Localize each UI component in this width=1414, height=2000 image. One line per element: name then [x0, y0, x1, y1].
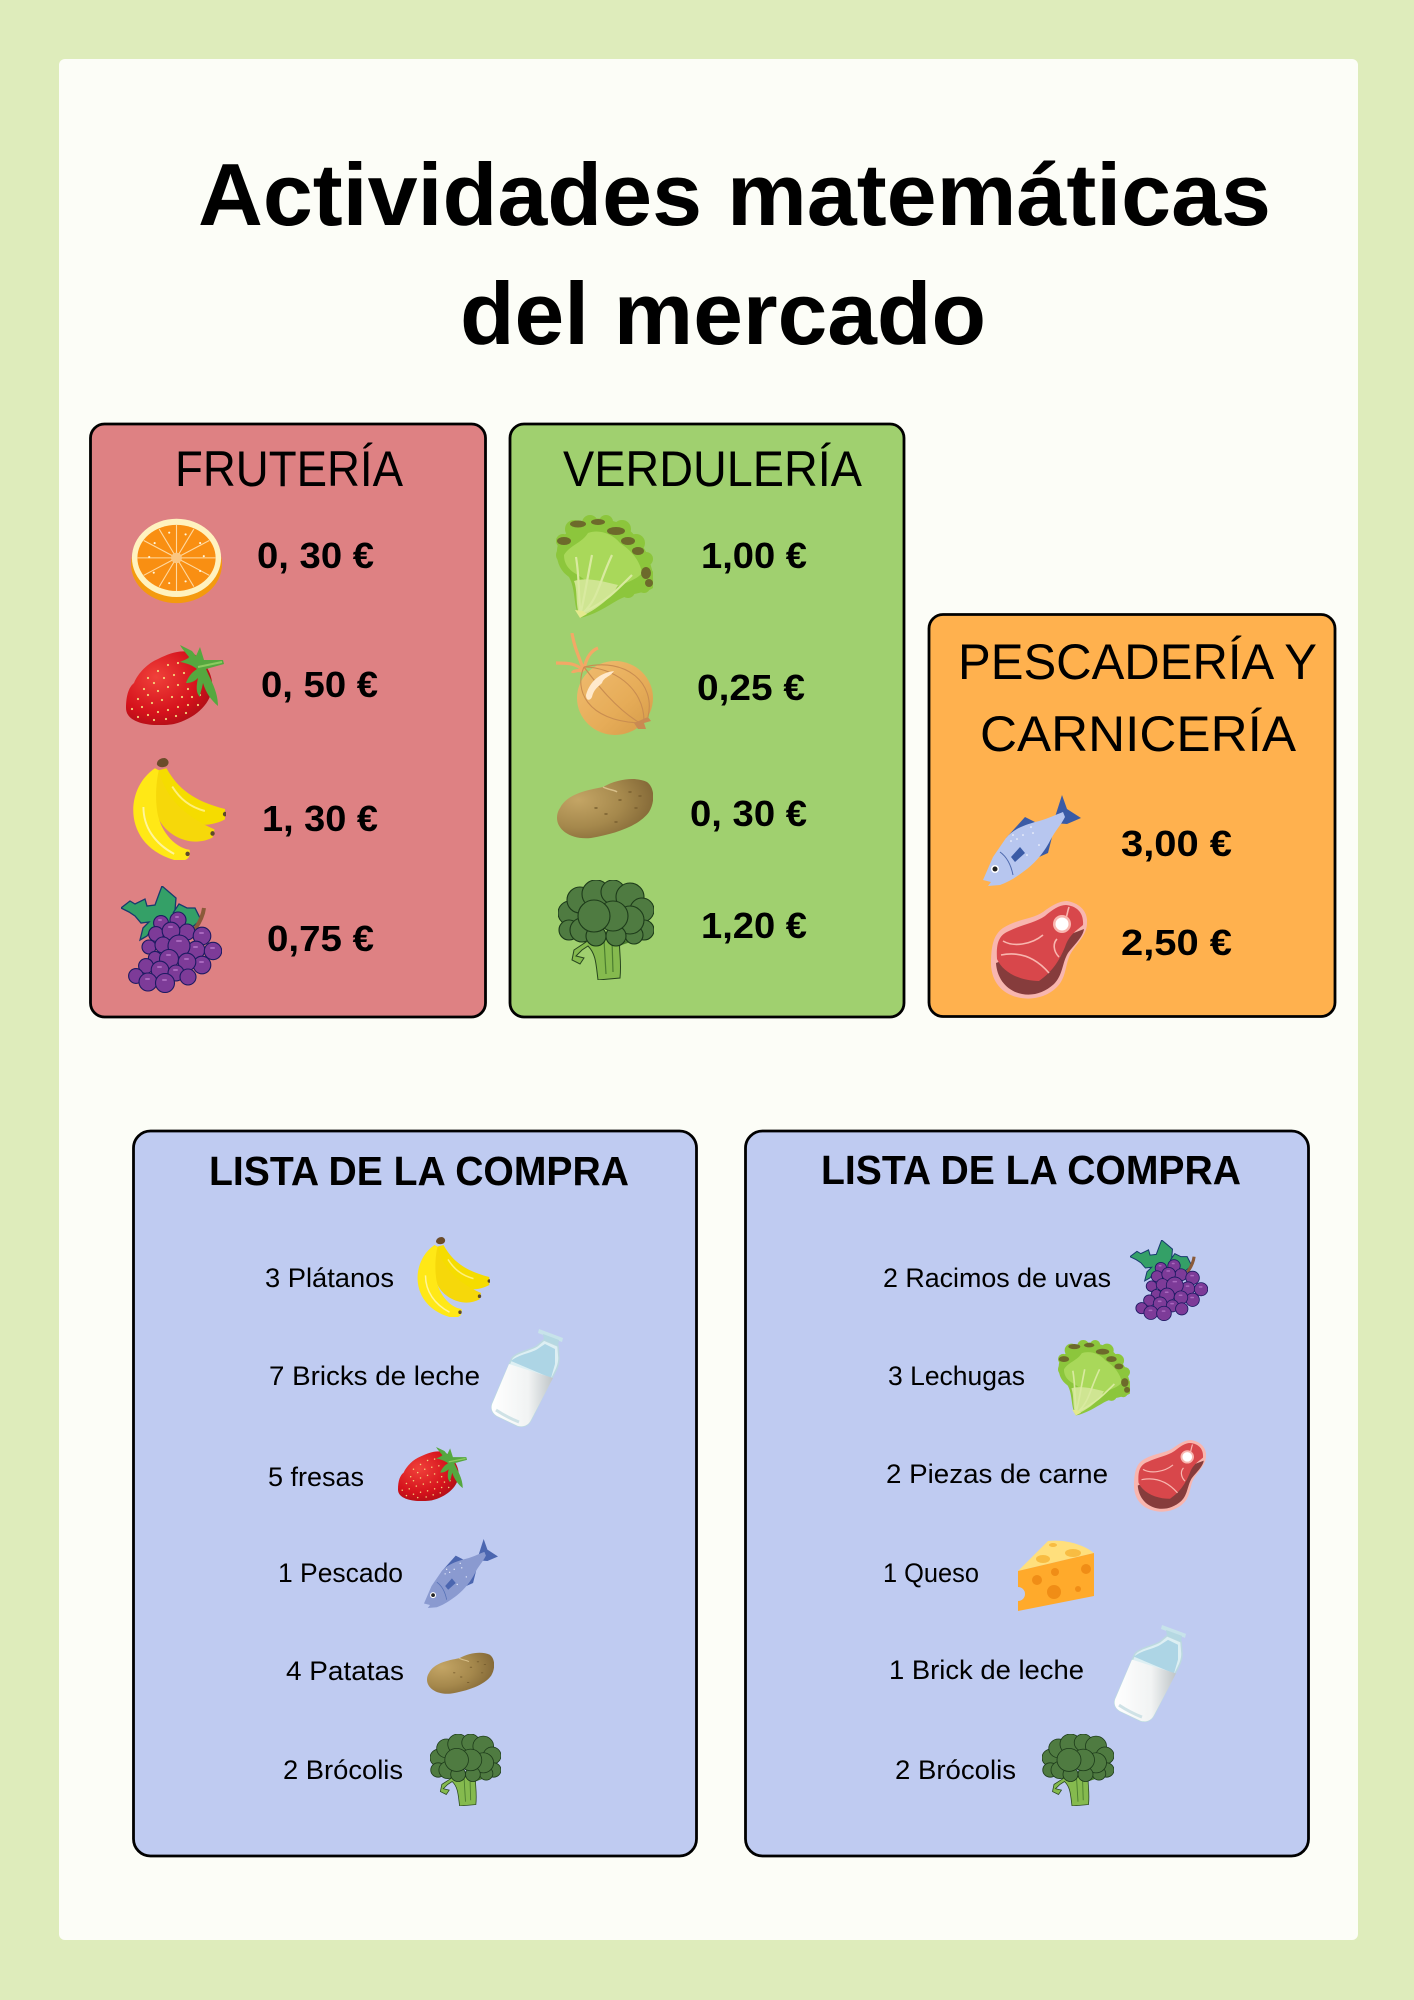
item: 3 lechugas: 3 Lechugas [888, 1361, 1025, 1391]
icon: bananas [418, 1237, 489, 1318]
price: lettuce: 1,00 € [701, 535, 807, 576]
icon: grapes [121, 886, 222, 992]
icon: fish [424, 1539, 498, 1608]
item: 2 brócolis: 2 Brócolis [283, 1755, 403, 1785]
title: Actividades matemáticas [198, 145, 1271, 244]
panel: shopping list 2 [746, 1131, 1308, 1856]
icon: strawberry [126, 645, 224, 725]
item: 7 bricks de leche: 7 Bricks de leche [269, 1361, 480, 1391]
price: fish: 3,00 € [1121, 823, 1232, 864]
panel: verdulería [510, 424, 904, 1017]
price: grapes: 0,75 € [267, 918, 374, 959]
icon: lettuce [1058, 1340, 1131, 1416]
icon: broccoli [430, 1734, 501, 1806]
icon: meat [991, 901, 1087, 999]
icon: orange [131, 519, 222, 603]
heading: pescadería y carnicería: PESCADERÍA Y [958, 634, 1317, 690]
title: del mercado [460, 264, 986, 363]
item: 1 brick de leche: 1 Brick de leche [889, 1655, 1084, 1685]
icon: potato [427, 1653, 494, 1694]
heading: frutería: FRUTERÍA [175, 441, 404, 497]
price: strawberry: 0, 50 € [261, 664, 378, 705]
title [198, 145, 1271, 363]
icon: meat [1134, 1440, 1206, 1512]
price: bananas: 1, 30 € [262, 798, 378, 839]
icon: grapes [1130, 1240, 1208, 1321]
item: 2 racimos de uvas: 2 Racimos de uvas [883, 1263, 1111, 1293]
icon: cheese [1018, 1541, 1094, 1611]
item: 4 patatas: 4 Patatas [286, 1656, 404, 1686]
icon: broccoli [1042, 1734, 1114, 1806]
icon: milk bottle [492, 1329, 563, 1426]
icon: fish [983, 795, 1081, 886]
price: orange: 0, 30 € [257, 535, 374, 576]
icon: lettuce [556, 515, 654, 618]
item: 1 queso: 1 Queso [883, 1558, 979, 1588]
icon: milk bottle [1115, 1625, 1186, 1721]
heading: pescadería y carnicería: CARNICERÍA [980, 706, 1297, 762]
price: onion: 0,25 € [697, 667, 805, 708]
item: 5 fresas: 5 fresas [268, 1462, 364, 1492]
icon: onion [556, 633, 653, 735]
icon: broccoli [558, 880, 654, 980]
item: 3 plátanos: 3 Plátanos [265, 1263, 394, 1293]
panel: shopping list 1 [134, 1131, 696, 1856]
item: 2 piezas de carne: 2 Piezas de carne [886, 1459, 1108, 1489]
price: broccoli: 1,20 € [701, 905, 807, 946]
icon: potato [557, 779, 653, 838]
icon: strawberry [398, 1447, 467, 1501]
item: 1 pescado: 1 Pescado [278, 1558, 403, 1588]
heading: pescadería y carnicería [958, 634, 1317, 762]
price: potato: 0, 30 € [690, 793, 807, 834]
heading: shopping list 2: LISTA DE LA COMPRA [821, 1147, 1241, 1193]
item: 2 brócolis: 2 Brócolis [895, 1755, 1016, 1785]
price: meat: 2,50 € [1121, 922, 1232, 963]
panel: frutería [90, 424, 486, 1017]
heading: shopping list 1: LISTA DE LA COMPRA [209, 1148, 629, 1194]
heading: verdulería: VERDULERÍA [563, 441, 863, 497]
icon: bananas [133, 758, 225, 861]
panel: pescadería y carnicería [929, 614, 1335, 1016]
